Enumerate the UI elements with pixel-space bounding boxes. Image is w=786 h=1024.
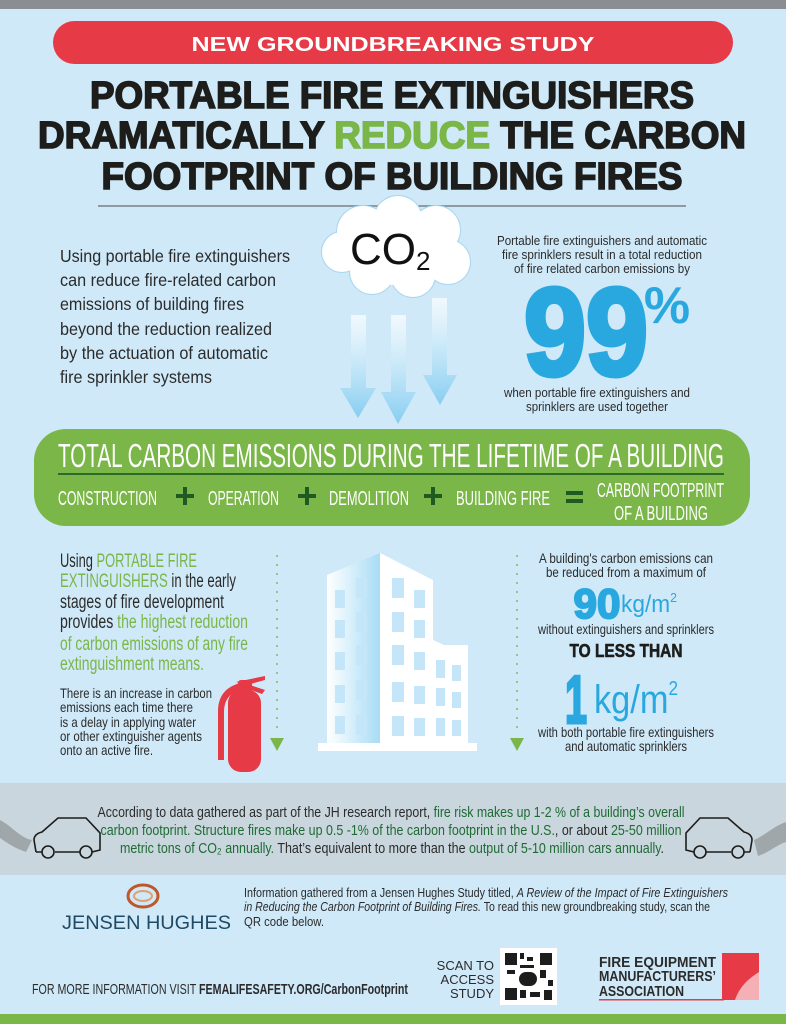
title: DRAMATICALLY REDUCE THE CARBON <box>38 115 746 157</box>
icon: fire extinguisher <box>218 676 265 772</box>
QR code <box>500 948 557 1005</box>
stat: 90 to 1 kg/m2: with both portable fire extinguishers <box>537 724 714 740</box>
text: study source: in Reducing the Carbon Footprint of Building Fires. To read this new groundbreaking study, scan the <box>244 899 710 914</box>
title: FOOTPRINT OF BUILDING FIRES <box>102 156 682 198</box>
logo: FEMA <box>599 953 759 1000</box>
stat: 99%: 99 <box>524 264 648 402</box>
icon: car right <box>686 818 752 858</box>
stat: 90 to 1 kg/m2: without extinguishers and sprinklers <box>537 621 714 637</box>
panel: total carbon emissions: OF A BUILDING <box>614 503 708 525</box>
text: portable fire extinguishers benefit: provides the highest reduction <box>60 612 248 633</box>
stat: 99% <box>497 233 707 414</box>
stat: 90 to 1 kg/m2: 1 <box>565 662 587 738</box>
logo: FEMA: MANUFACTURERS’ <box>599 968 716 985</box>
text: delay note: emissions each time there <box>60 699 193 715</box>
text: study source: QR code below. <box>244 914 324 929</box>
intro text: Using portable fire extinguishers <box>60 246 290 266</box>
dotted arrow left <box>270 555 284 751</box>
intro text: emissions of building fires <box>60 294 244 314</box>
text: delay note: onto an active fire. <box>60 742 153 758</box>
text: portable fire extinguishers benefit <box>60 551 248 675</box>
text: delay note <box>60 685 212 758</box>
text: study source: Information gathered from a Jensen Hughes Study titled, A Review of the Impact of Fire Extinguishers <box>244 885 728 900</box>
icon: smoke right <box>754 822 786 856</box>
panel: carbon facts band <box>0 783 786 875</box>
text: portable fire extinguishers benefit: EXTINGUISHERS in the early <box>60 571 236 592</box>
stat: 90 to 1 kg/m2 <box>537 550 714 754</box>
scan label <box>437 958 494 1001</box>
stat: 99%: sprinklers are used together <box>526 399 669 414</box>
intro text <box>60 246 290 387</box>
title <box>38 75 746 198</box>
stat: 99%: of fire related carbon emissions by <box>514 261 690 276</box>
panel: total carbon emissions <box>34 429 750 526</box>
text: facts: carbon footprint. Structure fires make up 0.5 -1% of the carbon footprint in the U.S., or about 25-50 million <box>100 822 682 839</box>
stat: 90 to 1 kg/m2: 90 <box>574 580 620 627</box>
text: portable fire extinguishers benefit: of carbon emissions of any fire <box>60 634 248 655</box>
logo: Jensen Hughes: JENSEN HUGHES <box>62 913 231 934</box>
panel: total carbon emissions: CONSTRUCTION <box>58 488 157 510</box>
logo: FEMA: ASSOCIATION <box>599 983 684 1000</box>
text: delay note: is a delay in applying water <box>60 714 196 730</box>
stat: 90 to 1 kg/m2: 2 <box>668 678 678 700</box>
stat: 90 to 1 kg/m2: 2 <box>670 590 677 605</box>
stat: 99%: fire sprinklers result in a total reduction <box>502 247 702 262</box>
intro text: fire sprinkler systems <box>60 367 212 387</box>
footer link: FOR MORE INFORMATION VISIT FEMALIFESAFETY.ORG/CarbonFootprint <box>32 981 408 998</box>
intro text: beyond the reduction realized <box>60 319 272 339</box>
stat: 90 to 1 kg/m2: A building's carbon emissions can <box>539 550 713 566</box>
text: portable fire extinguishers benefit: stages of fire development <box>60 592 225 613</box>
scan label: STUDY <box>450 986 494 1001</box>
text: portable fire extinguishers benefit: extinguishment means. <box>60 654 204 675</box>
icon: smoke left <box>0 820 32 852</box>
stat: 99%: Portable fire extinguishers and automatic <box>497 233 707 248</box>
stat: 99%: when portable fire extinguishers and <box>503 385 690 400</box>
text: portable fire extinguishers benefit: Using PORTABLE FIRE <box>60 551 197 572</box>
arrows down <box>340 298 457 424</box>
text: study source <box>244 885 728 929</box>
stat: 90 to 1 kg/m2: kg/m <box>594 678 681 722</box>
scan label: ACCESS <box>441 972 494 987</box>
banner: new groundbreaking study <box>53 21 733 64</box>
icon: CO2 cloud: CO <box>350 225 416 274</box>
panel: total carbon emissions: BUILDING FIRE <box>456 488 550 510</box>
stat: 90 to 1 kg/m2: be reduced from a maximum of <box>546 564 706 580</box>
banner: new groundbreaking study: NEW GROUNDBREAKING STUDY <box>192 34 595 56</box>
icon: CO2 cloud <box>322 196 470 297</box>
stat: 90 to 1 kg/m2: and automatic sprinklers <box>565 738 687 754</box>
stat: 90 to 1 kg/m2: TO LESS THAN <box>570 641 682 661</box>
icon: building <box>318 553 477 751</box>
text: delay note: or other extinguisher agents <box>60 728 202 744</box>
logo: Jensen Hughes <box>62 885 231 934</box>
logo: FEMA: FIRE EQUIPMENT <box>599 954 716 971</box>
dotted arrow right <box>510 555 524 751</box>
panel: total carbon emissions: OPERATION <box>208 488 279 510</box>
icon: CO2 cloud: 2 <box>416 246 430 276</box>
text: facts: According to data gathered as part of the JH research report, fire risk makes up 1-2 % of a building’s overall <box>98 804 684 821</box>
icon: car left <box>34 818 100 858</box>
scan label: SCAN TO <box>437 958 494 973</box>
text: facts: metric tons of CO₂ annually. That’s equivalent to more than the output of 5-10 million cars annually. <box>120 840 664 857</box>
panel: total carbon emissions: DEMOLITION <box>329 488 409 510</box>
intro text: can reduce fire-related carbon <box>60 270 276 290</box>
stat: 90 to 1 kg/m2: kg/m <box>621 591 673 618</box>
text: facts <box>98 804 684 857</box>
title: PORTABLE FIRE EXTINGUISHERS <box>90 75 694 117</box>
stat: 99%: % <box>644 277 690 335</box>
intro text: by the actuation of automatic <box>60 343 268 363</box>
text: delay note: There is an increase in carbon <box>60 685 212 701</box>
